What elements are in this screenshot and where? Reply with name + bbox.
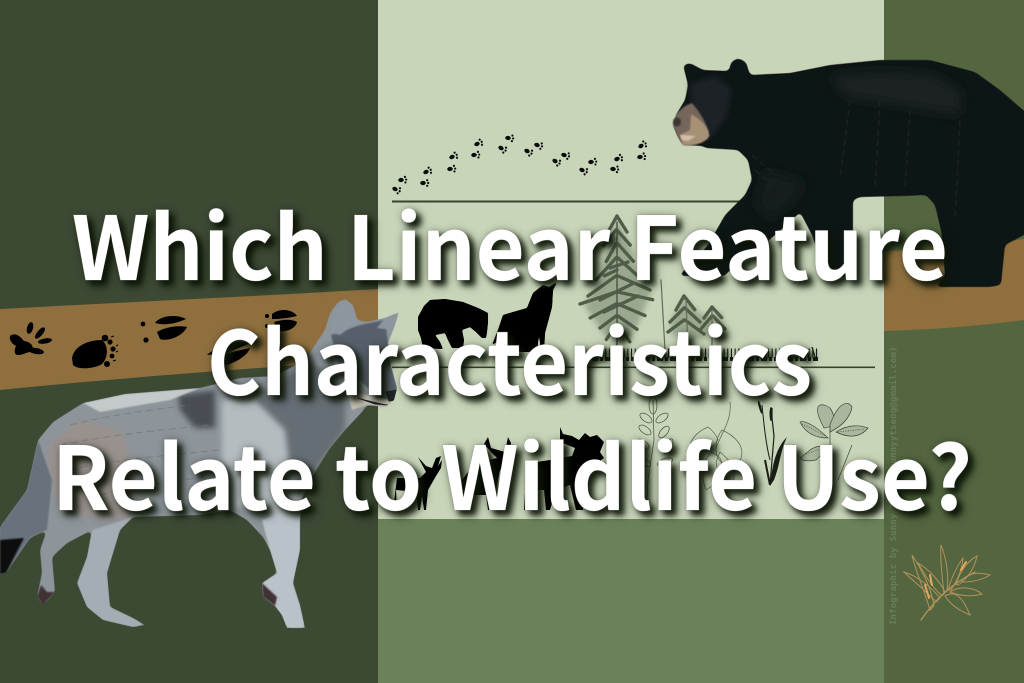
silhouette: howling wolf <box>492 282 557 352</box>
bear body <box>673 58 1024 287</box>
bear illustration <box>673 58 1024 287</box>
track: elk hoof <box>207 342 250 366</box>
animal tracks on trail <box>10 310 297 368</box>
title <box>52 179 972 536</box>
title line 2: Characteristics <box>207 294 812 421</box>
small animal track trail <box>391 134 648 195</box>
credit watermark: Infographic by Sunny Tseng (sunnyytseng@gmail.com) <box>888 345 899 625</box>
icon: golden sprig <box>904 545 990 620</box>
bear mouth <box>680 135 696 141</box>
track: deer hoof <box>141 316 187 343</box>
panel: centre lower green band <box>378 519 884 683</box>
silhouette: elk <box>461 437 512 510</box>
track: moose hoof <box>265 310 297 331</box>
bear head <box>690 76 732 140</box>
silhouette: bear <box>418 299 488 349</box>
silhouette: moose <box>524 427 604 510</box>
plant: leafy stem <box>635 396 675 502</box>
bear muzzle <box>673 103 709 145</box>
wolf body <box>0 299 399 628</box>
plant: cattail <box>757 400 787 486</box>
silhouette: deer <box>393 456 442 510</box>
bear nose <box>673 118 681 126</box>
trail band: left <box>0 289 378 390</box>
tree: small conifers <box>661 280 726 350</box>
bear fur strokes <box>752 100 960 220</box>
title line 1: Which Linear Feature <box>72 179 948 306</box>
tree: large conifer <box>580 216 654 350</box>
sprig highlights <box>925 562 966 598</box>
ground line: upper <box>392 200 752 202</box>
track: wolf paw <box>10 321 52 355</box>
bear shoulder lighter fur <box>755 170 805 220</box>
wolf illustration <box>0 299 399 628</box>
trail band: right <box>884 239 1024 331</box>
panel: centre pale green background <box>378 0 884 519</box>
wolf painted fur shading <box>0 299 399 628</box>
grass strip <box>592 347 818 360</box>
bear back lighter fur <box>830 72 960 115</box>
track: bear paw <box>72 335 118 368</box>
title line 3: Relate to Wildlife Use? <box>52 409 972 536</box>
trees and grass <box>580 216 818 360</box>
ground line: lower <box>392 366 875 368</box>
plant: birch leaves <box>690 402 742 490</box>
panel: right green background <box>884 0 1024 683</box>
panel: left dark green background <box>0 0 378 683</box>
bear chin <box>680 114 709 145</box>
plant: broad-leaf shrub <box>800 403 868 480</box>
